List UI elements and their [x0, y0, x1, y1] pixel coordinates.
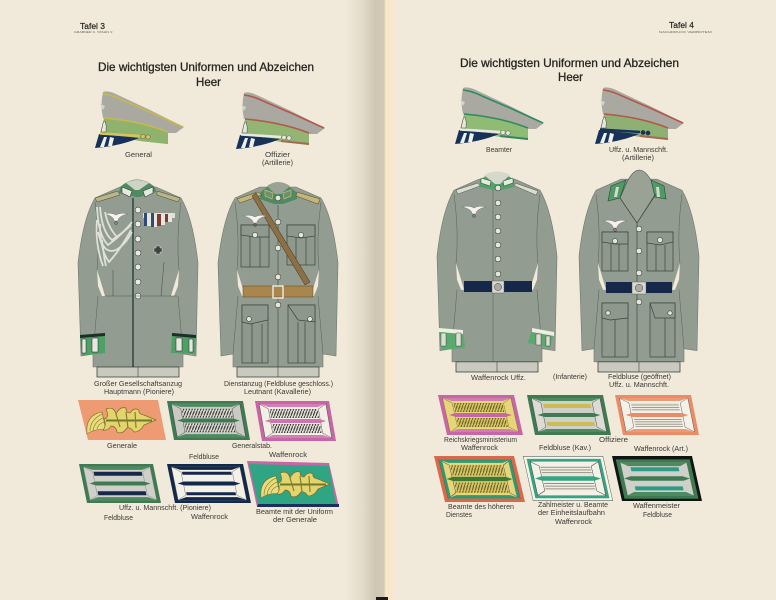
eagle [462, 206, 486, 217]
collar patch: Zahlmeister: Zahlmeister u. Beamte [538, 502, 608, 509]
caption: Dienstanzug (Feldbluse geschloss.) [224, 381, 333, 388]
caption: Feldbluse (geöffnet) [608, 374, 671, 381]
caption [608, 374, 671, 389]
page: Tafel 3 [74, 22, 339, 524]
caption: Großer Gesellschaftsanzug [94, 381, 182, 388]
collar patch: Reichskriegsministerium: Reichskriegsministerium [444, 437, 517, 444]
eagle [104, 213, 128, 224]
caption: Waffenrock Uffz. [471, 375, 526, 382]
shoulder boards [95, 191, 180, 202]
jacket: Dienstanzug [218, 182, 338, 396]
buttons [247, 195, 312, 321]
collar patch: Offiziere Feldbluse: Feldbluse (Kav.) [539, 445, 591, 452]
cap: Uffz. u. Mannschft. [595, 87, 684, 162]
cap: Offizier [236, 92, 325, 167]
cap: Uffz. u. Mannschft.: Uffz. u. Mannschft. [609, 147, 668, 154]
belt [606, 282, 672, 294]
collar patch: Beamte des höheren Dienstes [434, 456, 525, 519]
collar patch: Generalstab Feldbluse: Feldbluse [189, 454, 219, 461]
jacket: Großer Gesellschaftsanzug [78, 180, 198, 396]
title left: Heer [196, 75, 221, 89]
shoulder boards [237, 192, 320, 204]
caption [471, 374, 587, 382]
collar patch: Generalstab Feldbluse [167, 401, 272, 461]
collar patch: Reichskriegsministerium: Waffenrock [461, 445, 499, 452]
medal ribbons [143, 213, 175, 227]
cuffs [80, 333, 196, 356]
collar patch: Uffz Waffenrock [167, 464, 251, 521]
caption [224, 381, 333, 396]
collar patch: Beamte des höheren Dienstes: Beamte des höheren [448, 504, 514, 511]
collar patch: Zahlmeister: Waffenrock [555, 519, 593, 526]
title right [460, 56, 679, 84]
collar patch: Beamte Generale: Beamte mit der Uniform [256, 509, 333, 516]
open collar and lapels [608, 170, 666, 362]
cap: Offizier: (Artillerie) [262, 160, 293, 167]
collar [260, 182, 297, 204]
buttons [495, 185, 501, 277]
page: Tafel 4 [434, 21, 712, 526]
plate number Tafel 3 [74, 22, 113, 34]
plate number Tafel 4: NACHDRUCK VERBOTEN! [659, 30, 712, 34]
plate number Tafel 4: Tafel 4 [669, 21, 695, 30]
collar [480, 172, 514, 190]
collar patch: Waffenmeister: Waffenmeister [633, 503, 681, 510]
collar patch: Waffenmeister: Feldbluse [643, 512, 672, 519]
cap: Uffz. u. Mannschft.: (Artillerie) [622, 155, 654, 162]
jacket: Waffenrock Uffz. [437, 172, 587, 382]
collar patch: Uffz Waffenrock: Waffenrock [191, 514, 229, 521]
iron cross [154, 246, 162, 254]
collar patch: Waffenmeister [612, 456, 702, 519]
caption: Leutnant (Kavallerie) [244, 389, 311, 396]
title left [98, 60, 314, 89]
collar patch: Zahlmeister [523, 456, 613, 526]
belt [243, 286, 313, 298]
caption [94, 381, 182, 396]
collar patch: Offiziere Waffenrock: Waffenrock (Art.) [634, 446, 688, 453]
collar patch: Generalstab Feldbluse: Generalstab. [232, 443, 272, 450]
cap: General: General [125, 152, 152, 159]
title left: Die wichtigsten Uniformen und Abzeichen [98, 60, 314, 74]
collar patch: Reichskriegsministerium [438, 395, 523, 452]
plate number Tafel 4 [659, 21, 712, 34]
waist seam [105, 262, 177, 296]
caption: Hauptmann (Pioniere) [104, 389, 174, 396]
plate number Tafel 3: GRABNER C. STAHN V. [74, 30, 113, 34]
collar patch: Beamte des höheren Dienstes: Dienstes [446, 512, 472, 519]
jacket: Feldbluse geöffnet [579, 170, 699, 389]
title right: Heer [558, 70, 583, 84]
collar patch: Uffz Feldbluse [79, 464, 211, 522]
collar patch: Beamte Generale: der Generale [273, 517, 317, 524]
eagle [243, 215, 267, 226]
collar patch: Beamte Generale [247, 461, 339, 524]
collar patch: Offiziere Feldbluse: Offiziere [599, 437, 628, 444]
collar patch: Generalstab Waffenrock: Waffenrock [269, 452, 308, 459]
strap [252, 193, 310, 285]
title right: Die wichtigsten Uniformen und Abzeichen [460, 56, 679, 70]
cap: Beamter [455, 87, 544, 154]
pockets [602, 232, 675, 357]
collar patch: Offiziere Waffenrock [615, 395, 699, 453]
buttons [135, 207, 141, 299]
caption: (Infanterie) [553, 374, 587, 381]
eagle [603, 220, 627, 231]
collar patch: Uffz Feldbluse: Feldbluse [104, 515, 133, 522]
plate number Tafel 3: Tafel 3 [80, 22, 106, 31]
aiguillette [97, 207, 132, 266]
pockets [241, 225, 315, 363]
collar patch: Generalstab Waffenrock [255, 401, 336, 459]
belt [464, 281, 532, 293]
collar patch: Uffz Feldbluse: Uffz. u. Mannschft. (Pioniere) [119, 505, 211, 512]
collar patch: Zahlmeister: der Einheitslaufbahn [538, 510, 605, 517]
collar [119, 180, 156, 197]
collar patch: Generale [78, 400, 166, 450]
cap: Offizier: Offizier [265, 152, 291, 159]
buttons [606, 226, 672, 315]
cap: General [95, 91, 184, 159]
cap: Beamter: Beamter [486, 147, 513, 154]
collar patch: Generale: Generale [107, 443, 137, 450]
collar patch: Offiziere Feldbluse [527, 395, 628, 452]
caption: Uffz. u. Mannschft. [609, 382, 669, 389]
cuffs [439, 328, 554, 350]
shoulder boards [456, 183, 538, 195]
